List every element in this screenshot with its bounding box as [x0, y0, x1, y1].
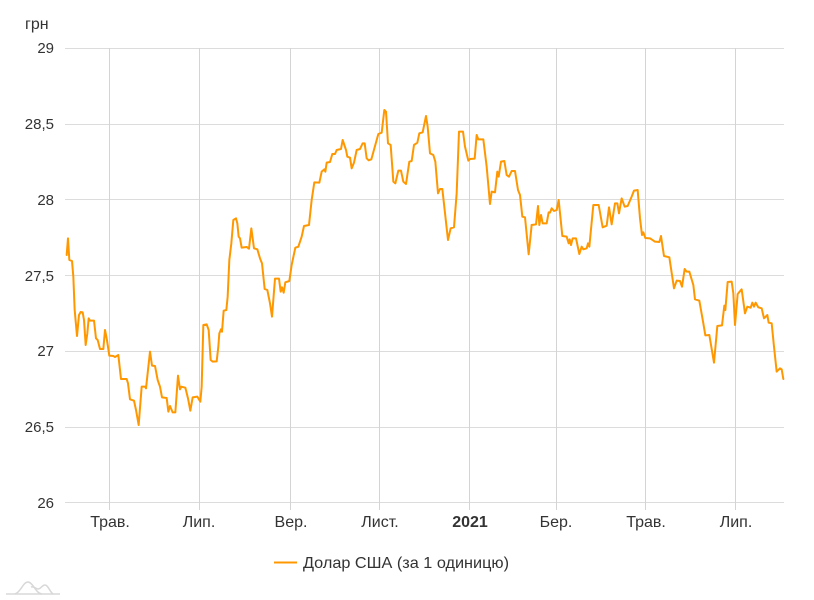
- y axis labels: 27,5: [25, 268, 54, 285]
- y axis labels: 28: [37, 192, 54, 209]
- y axis labels: 28,5: [25, 116, 54, 133]
- x axis labels: Лип.: [720, 514, 752, 531]
- x axis labels: Лист.: [361, 514, 399, 531]
- x axis labels: Трав.: [90, 514, 130, 531]
- y axis labels: 27: [37, 343, 54, 360]
- x axis labels: 2021: [452, 514, 488, 531]
- legend: Долар США (за 1 одиницю): [303, 555, 509, 572]
- data line: [67, 110, 783, 425]
- horizontal and vertical grid: [65, 48, 784, 510]
- y axis labels: 29: [37, 40, 54, 57]
- x axis labels: Лип.: [183, 514, 215, 531]
- x axis labels: [90, 514, 752, 531]
- x axis labels: Трав.: [626, 514, 666, 531]
- y axis unit label: грн: [25, 16, 49, 33]
- x axis labels: Вер.: [275, 514, 307, 531]
- y axis labels: 26: [37, 495, 54, 512]
- icon: faint logo: [6, 582, 60, 594]
- x axis labels: Бер.: [540, 514, 572, 531]
- y axis labels: 26,5: [25, 419, 54, 436]
- y axis labels: [25, 40, 54, 512]
